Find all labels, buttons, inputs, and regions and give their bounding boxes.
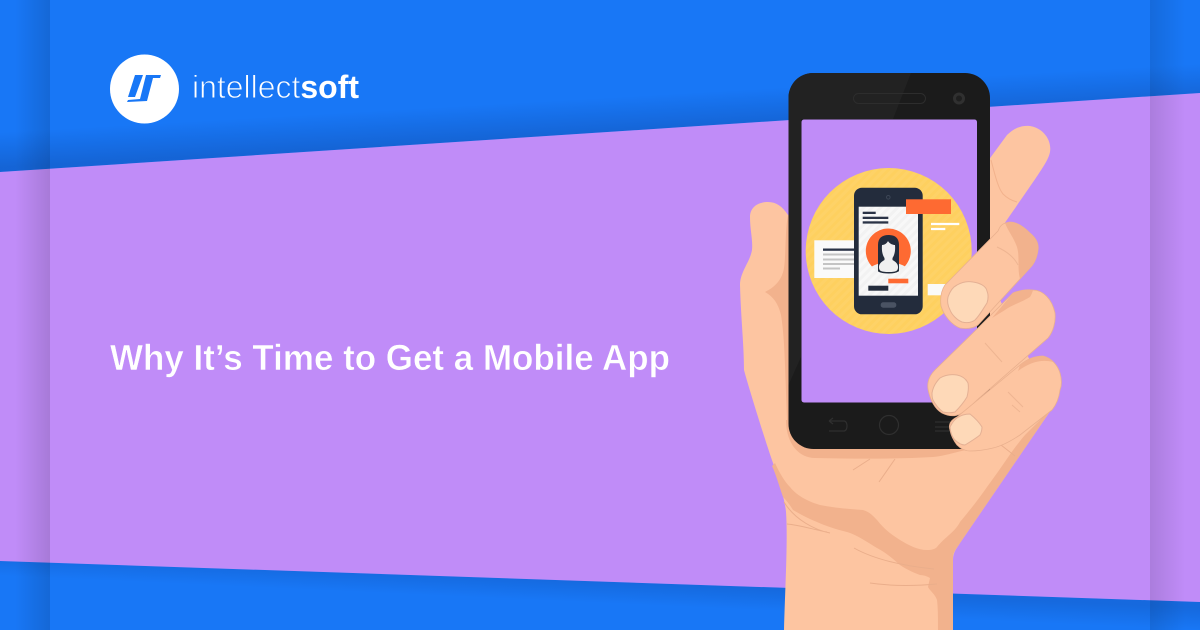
- index knuckle shadow: [1005, 222, 1038, 279]
- logo: [110, 54, 359, 124]
- mini screen: [859, 207, 918, 296]
- ring finger: [949, 356, 1062, 451]
- back button: [829, 418, 847, 431]
- home button: [880, 416, 898, 434]
- front camera: [954, 94, 964, 103]
- left card: [814, 240, 855, 278]
- phone screen: [802, 120, 977, 402]
- screen illustration: [806, 168, 972, 334]
- mini phone: [854, 188, 923, 314]
- index nail: [948, 282, 988, 323]
- yellow circle: [806, 168, 972, 334]
- white text lines: [931, 224, 959, 229]
- bottom edge shadow: [0, 561, 1200, 630]
- back finger crease: [991, 160, 1017, 202]
- back finger: [985, 126, 1050, 245]
- orange tag: [906, 199, 951, 214]
- ring nail: [950, 414, 982, 445]
- palm shadow: [772, 407, 1053, 630]
- logo mark: [127, 75, 161, 102]
- hand holding phone: [740, 73, 1062, 630]
- thumb shadow: [765, 215, 795, 420]
- middle finger shadow: [992, 290, 1033, 318]
- palm creases: [784, 445, 1015, 585]
- middle nail: [932, 375, 968, 413]
- mini navy button: [868, 286, 888, 291]
- phone sheen: [788, 73, 911, 385]
- left side fold shadow: [0, 0, 50, 630]
- avatar: [866, 228, 911, 276]
- small card: [928, 284, 952, 295]
- middle finger: [928, 290, 1055, 416]
- ring finger shadow: [1018, 356, 1053, 371]
- mini home button: [881, 302, 896, 308]
- logo wordmark: intellectsoft: [192, 69, 359, 105]
- mini camera: [886, 196, 890, 199]
- mini orange button: [888, 279, 908, 283]
- speaker: [854, 94, 926, 104]
- mini text lines: [863, 212, 876, 214]
- phone shadow: [786, 420, 975, 459]
- title: Why It’s Time to Get a Mobile App: [110, 337, 670, 378]
- index finger: [941, 222, 1038, 329]
- finger creases: [985, 247, 1023, 412]
- palm and wrist: [740, 202, 1053, 630]
- top edge shadow: [0, 53, 1200, 172]
- phone body: [788, 73, 990, 449]
- right side fold shadow: [1150, 0, 1200, 630]
- logo circle: [110, 54, 179, 124]
- menu button: [935, 422, 950, 431]
